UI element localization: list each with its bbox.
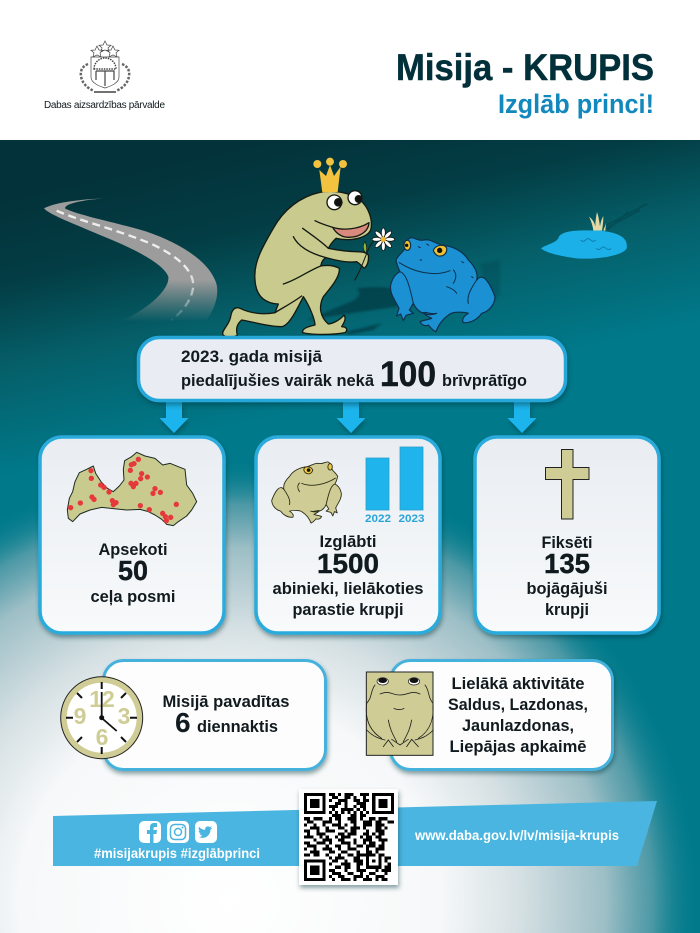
panel text: abinieki, lielākoties [272, 579, 424, 598]
panel text: diennaktis [197, 718, 278, 736]
social icons [139, 821, 217, 843]
callout: volunteers [138, 338, 566, 433]
panel: road sections surveyed [40, 437, 224, 633]
bar chart: 2022 and 2023: 2022 [365, 513, 391, 525]
panel text [526, 533, 608, 619]
callout box [138, 338, 566, 400]
map of Latvia with red dots [67, 452, 197, 526]
panel text [162, 692, 290, 738]
callout text: 100 [380, 355, 436, 394]
illustration: blue toad [390, 238, 495, 332]
frog eyes [327, 195, 342, 210]
QR code [299, 789, 398, 885]
panel text: Apsekoti [98, 540, 168, 559]
frog mouth [333, 223, 369, 237]
website address: www.daba.gov.lv/lv/misija-krupis [414, 828, 619, 843]
icon: instagram [167, 821, 189, 843]
panel: highest activity [366, 660, 612, 770]
panel text: ceļa posmi [90, 587, 176, 606]
panel text: Misijā pavadītas [162, 692, 290, 711]
panel text: 6 [175, 707, 191, 738]
panel text: bojāgājuši [526, 579, 608, 598]
arrows to panels [160, 402, 536, 433]
icon: facebook [139, 821, 161, 843]
callout text: piedalījušies vairāk nekā [181, 371, 375, 390]
panel: amphibians rescued [256, 437, 440, 633]
panel text: Lielākā aktivitāte [452, 674, 584, 693]
icon: clock [61, 677, 143, 759]
hashtags: #misijakrupis #izglābprinci [94, 845, 260, 861]
crown [313, 158, 347, 192]
icon: twitter [195, 821, 217, 843]
icon: beige toad [272, 462, 341, 523]
panel text: 50 [118, 555, 148, 586]
panel: six days spent [61, 660, 325, 770]
agency name: Dabas aizsardzības pārvalde [44, 100, 165, 111]
panel text: Jaunlazdonas, [462, 716, 574, 735]
panel text [90, 540, 176, 606]
title: Misija - KRUPIS [396, 47, 654, 88]
illustration: frog prince kneeling with flower [223, 158, 395, 337]
footer banner [53, 801, 657, 866]
pond illustration [541, 204, 647, 259]
icon: coat of arms [81, 41, 129, 92]
panel text [272, 532, 424, 619]
callout text [181, 347, 527, 394]
flower [355, 228, 395, 280]
panel text: Izglābti [320, 532, 376, 551]
subtitle: Izglāb princi! [498, 89, 654, 119]
icon: clock: 12 [89, 686, 115, 712]
icon: clock: 3 [118, 703, 130, 729]
bar chart: 2022 and 2023 [365, 447, 424, 525]
logo: Latvian coat of arms with agency name [44, 41, 165, 111]
icon: clock: 9 [74, 703, 86, 729]
panel text: Saldus, Lazdonas, [448, 695, 588, 714]
callout text: brīvprātīgo [442, 371, 527, 390]
frog body [223, 191, 371, 337]
callout text: 2023. gada misijā [181, 347, 323, 366]
panel text [448, 674, 588, 756]
panel text: parastie krupji [292, 600, 404, 619]
icon: toad portrait [366, 672, 433, 755]
illustration: shadows under the characters [307, 260, 500, 335]
panel text: 1500 [317, 548, 379, 579]
road illustration [44, 198, 217, 322]
icon: clock: 6 [96, 724, 108, 750]
panel text: Fiksēti [542, 533, 592, 552]
panel text: krupji [545, 600, 589, 619]
bar chart: 2022 and 2023: 2023 [398, 513, 424, 525]
panel text: Liepājas apkaimē [450, 737, 586, 756]
panel text: 135 [544, 548, 590, 579]
icon: cross [546, 450, 589, 519]
panel: dead toads recorded [475, 437, 659, 633]
